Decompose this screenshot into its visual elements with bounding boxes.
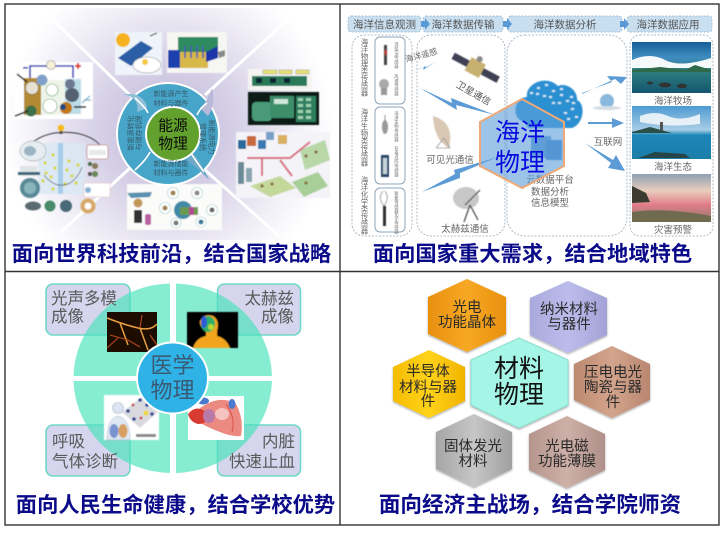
image: breath analysis <box>104 395 159 440</box>
sensors column: 有毒点阵传感器 <box>394 145 400 178</box>
box labels: 气体诊断 <box>52 452 118 471</box>
hexagon: crystals <box>428 279 506 352</box>
signal labels <box>404 46 622 235</box>
image: smart grid <box>236 132 330 198</box>
ring text: 材料与器件 <box>154 168 188 177</box>
sensors column: 海洋生物传感器 <box>394 110 400 143</box>
image: electrochemical cell <box>18 125 110 214</box>
hexagon: ceramics: 陶瓷与器 <box>584 379 642 396</box>
globe <box>593 94 621 110</box>
ring text: 新能源电力 <box>208 120 216 154</box>
sensors column: 海洋物理类传感器 <box>360 37 370 98</box>
image: device chip <box>167 32 227 73</box>
box labels: 光声多模 <box>51 289 117 308</box>
terahertz dish <box>453 187 480 222</box>
ring separators <box>135 98 207 172</box>
box labels <box>51 289 295 471</box>
platform text: 数据分析 <box>531 186 569 198</box>
workflow header: 海洋数据分析 <box>534 18 597 31</box>
photo: ocean ranch <box>632 42 711 93</box>
ring text: 新能源转化 <box>126 116 135 150</box>
hexagon label: ocean physics: 物理 <box>495 149 545 177</box>
inner white ring <box>145 106 201 162</box>
center circle: medical physics <box>137 342 208 414</box>
box labels: 太赫兹 <box>244 289 294 308</box>
panel: medical physics <box>16 284 335 517</box>
hexagon: ceramics <box>574 346 650 418</box>
photo: disaster warning <box>632 174 711 222</box>
dashed columns <box>352 35 713 236</box>
label boxes <box>46 284 300 476</box>
heading: materials panel: 面向经济主战场，结合学院师资 <box>379 492 681 517</box>
signal labels: 可见光通信 <box>426 154 474 166</box>
image: storage applications <box>127 184 222 230</box>
panel: ocean physics <box>348 16 713 266</box>
heading: medical panel: 面向人民生命健康，结合学校优势 <box>16 492 335 517</box>
photo: ocean ecology <box>632 106 711 159</box>
hexagon: semiconductor: 半导体 <box>406 363 450 380</box>
hexagon: luminescent: 固体发光 <box>444 438 502 455</box>
signal lightning arrows <box>407 62 627 192</box>
image: green pcb <box>248 92 319 125</box>
signal labels: 互联网 <box>594 137 622 148</box>
signal labels: 太赫兹通信 <box>441 223 489 235</box>
hexagon label: ocean physics <box>480 99 564 188</box>
sensors column: 温盐深传感器 <box>394 41 400 70</box>
hexagon: nano: 纳米材料 <box>540 301 598 318</box>
hexagon: crystals: 功能晶体 <box>438 314 496 331</box>
photo captions: 海洋牧场 <box>654 95 692 107</box>
heading: ocean panel: 面向国家重大需求，结合地域特色 <box>373 241 692 266</box>
core label: 能源 <box>158 118 188 134</box>
sensors column: 海洋化学类传感器 <box>360 175 370 236</box>
box labels: 呼吸 <box>52 432 85 451</box>
workflow header: 海洋数据应用 <box>636 18 700 31</box>
box labels: 成像 <box>51 307 84 326</box>
platform text <box>526 174 574 209</box>
signal labels: 海洋遥感 <box>404 46 438 64</box>
ring sweep accents <box>123 88 213 180</box>
hexagon: semiconductor <box>393 350 465 418</box>
hexagon: luminescent: 材料 <box>458 453 488 470</box>
box labels: 内脏 <box>262 432 295 451</box>
sensors column: 化学传感器 <box>394 211 400 235</box>
hexagon label: ocean physics: 海洋 <box>495 119 545 147</box>
ring text: 新能源产生 <box>154 89 188 98</box>
visible light dish <box>433 116 450 148</box>
image: circuit board <box>248 69 312 90</box>
ring text <box>126 89 216 177</box>
hexagon: thin films <box>529 416 605 488</box>
panel: materials physics <box>379 279 681 517</box>
sensors column: 风速传感器 <box>394 74 400 97</box>
box labels: 快速止血 <box>229 452 295 471</box>
image: heart <box>188 396 244 440</box>
platform text: 信息模型 <box>531 197 569 209</box>
central ring: energy topics <box>116 82 220 186</box>
core label: 物理 <box>158 136 188 152</box>
center hexagon: materials physics: 物理 <box>494 381 544 409</box>
sensors column: 氨氮传感器 <box>394 190 400 214</box>
hexagon: luminescent <box>436 414 512 487</box>
workflow header: 海洋数据传输 <box>432 18 495 31</box>
center circle: medical physics: 物理 <box>150 378 195 403</box>
signal labels: 卫星通信 <box>454 79 493 108</box>
hexagon: ceramics: 压电电光 <box>584 364 642 381</box>
white diagonal dividers <box>50 13 295 237</box>
panel: energy physics <box>8 8 338 266</box>
box labels: 成像 <box>261 307 294 326</box>
image: battery circuit <box>15 60 93 119</box>
hexagon: semiconductor: 件 <box>421 393 435 410</box>
hexagon: ceramics: 件 <box>606 394 620 411</box>
hexagon: crystals: 光电 <box>452 299 482 316</box>
image: solar cell <box>115 32 162 75</box>
workflow header: 海洋信息观测 <box>353 18 416 31</box>
quadrant disc <box>74 284 272 473</box>
ring text: 材料与器件 <box>154 98 188 108</box>
green core <box>147 108 199 160</box>
photo captions <box>654 95 692 236</box>
hexagon: thin films: 光电磁 <box>545 438 589 455</box>
hexagon: semiconductor: 材料与器 <box>399 379 457 396</box>
center hexagon: materials physics: 材料 <box>494 355 544 383</box>
ring text: 新能源储能 <box>154 159 188 168</box>
sensors column <box>360 37 405 236</box>
lavender background <box>8 8 338 240</box>
center circle: medical physics: 医学 <box>150 353 195 378</box>
satellite <box>450 45 504 86</box>
cloud platform <box>515 81 583 160</box>
photo captions: 灾害预警 <box>654 224 692 236</box>
hexagon: thin films: 功能薄膜 <box>538 453 596 470</box>
ring text: 管理系统 <box>198 123 208 151</box>
workflow header <box>348 16 712 32</box>
ring text: 与储存机理 <box>134 116 143 150</box>
image: photoacoustic vessels <box>107 312 157 352</box>
photo captions: 海洋生态 <box>654 161 692 173</box>
core label <box>158 118 188 152</box>
image: terahertz body <box>187 312 238 348</box>
heading: energy panel: 面向世界科技前沿，结合国家战略 <box>12 241 332 266</box>
platform text: 云数据平台 <box>526 174 574 186</box>
hexagon: nano <box>530 281 607 353</box>
hexagon: nano: 与器件 <box>547 316 591 333</box>
sensors column: 海洋生物类传感器 <box>360 107 370 168</box>
center hexagon: materials physics <box>471 338 568 428</box>
